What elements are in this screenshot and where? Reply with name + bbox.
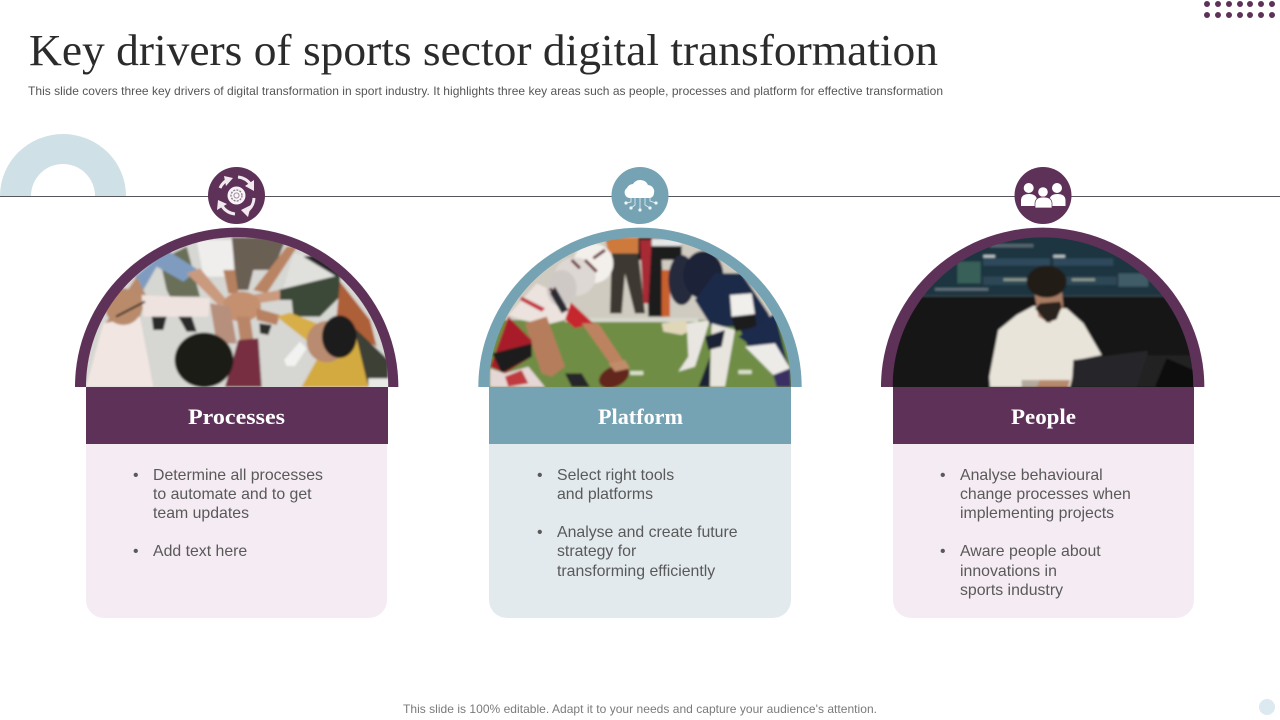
panel: people list: • bbox=[940, 543, 946, 560]
icon: cloud network bbox=[612, 167, 668, 224]
header: Processes bbox=[86, 387, 388, 444]
title: Key drivers of sports sector digital transformation bbox=[29, 26, 938, 75]
header: Platform: Platform bbox=[598, 404, 683, 429]
panel: platform list: Analyse and create future bbox=[557, 524, 738, 541]
panel: processes list: Determine all processes bbox=[153, 467, 323, 484]
panel: people list: • bbox=[940, 467, 946, 484]
panel: people list: sports industry bbox=[960, 582, 1063, 599]
panel: people list: change processes when bbox=[960, 486, 1131, 503]
column: platform bbox=[478, 167, 802, 618]
panel: people list: Analyse behavioural bbox=[960, 467, 1103, 484]
panel: processes list: Add text here bbox=[153, 543, 247, 560]
photo arch: team hands stacked bbox=[75, 228, 398, 390]
panel: platform list: • bbox=[537, 467, 543, 484]
timeline line bbox=[0, 196, 1280, 197]
panel: people list: innovations in bbox=[960, 563, 1057, 580]
panel: people list: Aware people about bbox=[960, 543, 1101, 560]
panel: people list bbox=[893, 444, 1194, 618]
panel: platform list: • bbox=[537, 524, 543, 541]
icon: rotating arrows and gear bbox=[208, 167, 265, 224]
panel: platform list bbox=[489, 444, 791, 618]
icon: group of people bbox=[1014, 167, 1072, 224]
panel: platform list: transforming efficiently bbox=[557, 563, 715, 580]
header: People: People bbox=[1011, 404, 1076, 429]
panel: processes list: to automate and to get bbox=[153, 486, 312, 503]
subtitle: This slide covers three key drivers of digital transformation in sport industry. It highlights three key areas such as people, processes and platform for effective transformation bbox=[28, 84, 943, 98]
panel: processes list: team updates bbox=[153, 505, 249, 522]
footer note: This slide is 100% editable. Adapt it to your needs and capture your audience's attention. bbox=[403, 702, 877, 716]
decorative half ring bbox=[0, 134, 126, 196]
panel: people list: implementing projects bbox=[960, 505, 1114, 522]
column: people bbox=[881, 167, 1204, 618]
panel: platform list: Select right tools bbox=[557, 467, 674, 484]
header: Processes: Processes bbox=[188, 404, 285, 429]
column: processes bbox=[75, 167, 398, 618]
panel: processes list bbox=[86, 444, 387, 618]
decorative dot grid bbox=[1204, 1, 1275, 18]
photo arch: american football line of scrimmage bbox=[478, 228, 802, 392]
panel: platform list: strategy for bbox=[557, 543, 637, 560]
decorative corner dot bbox=[1259, 699, 1275, 715]
panel: platform list: and platforms bbox=[557, 486, 653, 503]
panel: processes list: • bbox=[133, 467, 139, 484]
header: People bbox=[893, 387, 1194, 444]
photo arch: analyst at laptop before data wall bbox=[881, 228, 1204, 390]
panel: processes list: • bbox=[133, 543, 139, 560]
header: Platform bbox=[489, 387, 791, 444]
